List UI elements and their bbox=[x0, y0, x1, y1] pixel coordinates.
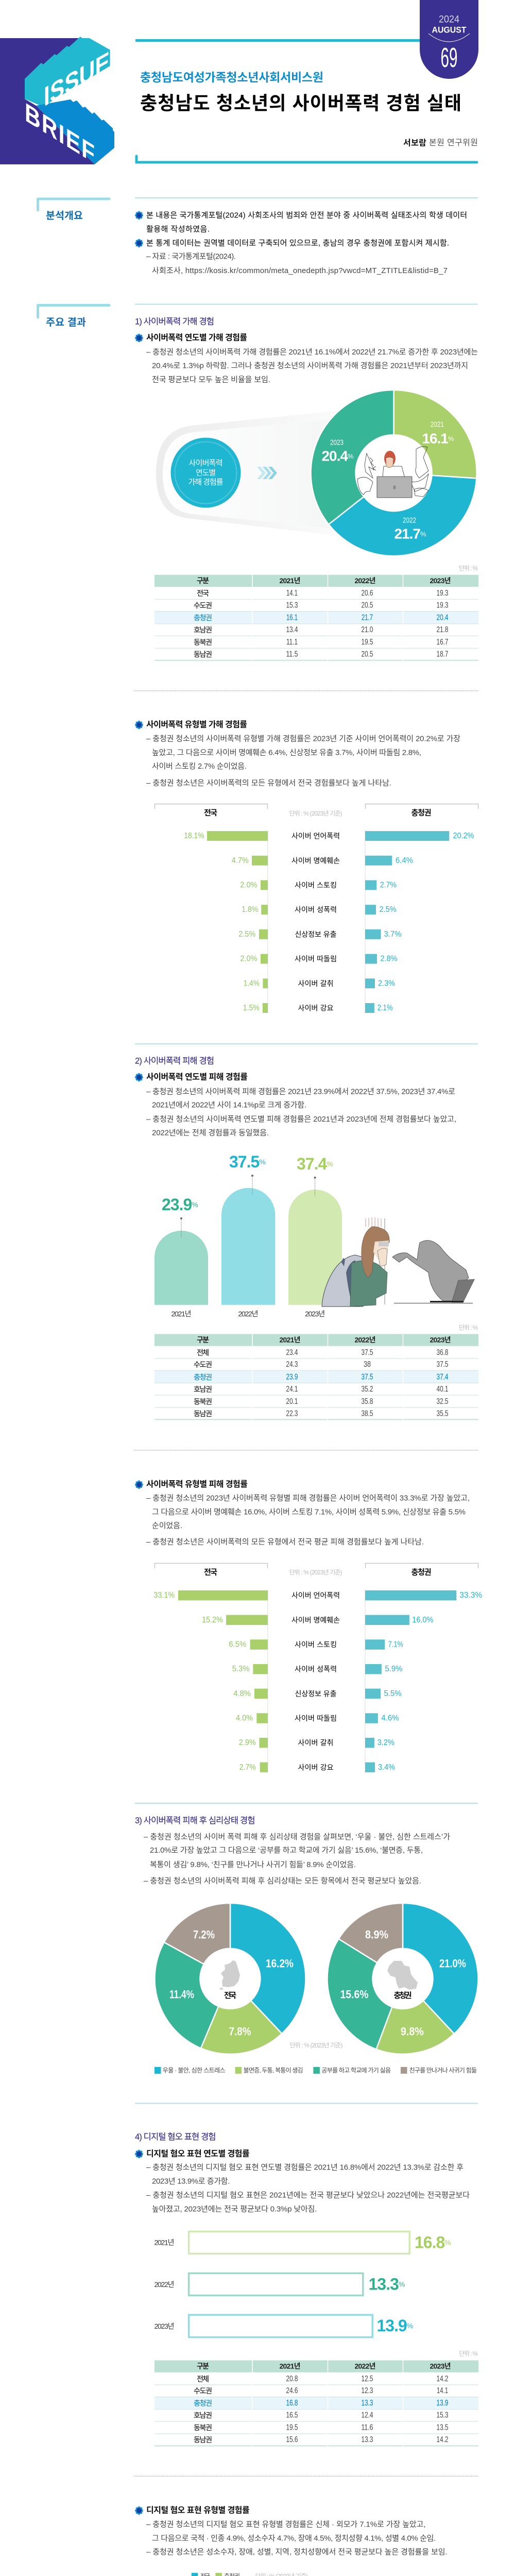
chungcheong bars bbox=[365, 831, 449, 1013]
table: victimisation by region: 37.5 bbox=[437, 1360, 448, 1369]
chart: victimisation by type, butterfly bars bbox=[153, 1563, 482, 1773]
icon: stressed student at laptop bbox=[357, 447, 428, 498]
national values: 1.5% bbox=[243, 1004, 260, 1012]
table: perpetration by region: 2023년 bbox=[430, 577, 451, 585]
type labels: 신상정보 유출 bbox=[295, 1689, 337, 1698]
table: victimisation by region: 38.5 bbox=[362, 1410, 373, 1418]
table: victimisation by region: 20.1 bbox=[286, 1397, 298, 1406]
text block: victimisation by type: – 충청권 청소년은 사이버폭력의 모든 유형에서 전국 평균 피해 경험률보다 높게 나타남. bbox=[146, 1537, 424, 1547]
table: victimisation by region: 35.8 bbox=[362, 1397, 373, 1406]
national values bbox=[153, 1591, 256, 1772]
table: victimisation by region: 35.5 bbox=[437, 1410, 448, 1418]
table: digital hate by region: 13.5 bbox=[437, 2424, 448, 2432]
table: perpetration by region: 20.5 bbox=[362, 650, 373, 658]
text block: victimisation by type: 순이었음. bbox=[152, 1521, 182, 1530]
chart: yearly victimisation arches bbox=[154, 1153, 342, 1318]
text block: yearly victimisation bbox=[135, 1073, 456, 1138]
table: digital hate by region: 동남권 bbox=[194, 2436, 212, 2444]
table: victimisation by region: 23.4 bbox=[286, 1348, 298, 1357]
national values: 4.7% bbox=[232, 856, 249, 865]
table: perpetration by region: 구분 bbox=[197, 577, 209, 585]
table: victimisation by region bbox=[154, 1324, 478, 1420]
leaders bbox=[180, 1175, 316, 1237]
organisation name: 충청남도여성가족청소년사회서비스원 bbox=[140, 71, 323, 84]
table: perpetration by region: 11.1 bbox=[286, 638, 298, 647]
table: victimisation by region: 24.1 bbox=[286, 1385, 298, 1394]
chart: national donut: 16.2% bbox=[266, 1957, 294, 1970]
table: perpetration by region: 13.4 bbox=[286, 625, 298, 634]
table: victimisation by region: 구분 bbox=[197, 1336, 209, 1344]
table: digital hate by region: 13.3 bbox=[362, 2399, 373, 2408]
national values: 2.0% bbox=[240, 955, 257, 963]
table: victimisation by region: 수도권 bbox=[194, 1361, 212, 1369]
subheading 2: 2) 사이버폭력 피해 경험 bbox=[135, 1056, 214, 1066]
chungcheong values: 20.2% bbox=[453, 832, 474, 840]
table: digital hate by region: 15.3 bbox=[437, 2411, 448, 2419]
chart: chungcheong donut: 충청권 bbox=[393, 1991, 412, 2000]
table: digital hate by region: 14.2 bbox=[437, 2375, 448, 2383]
chungcheong values: 16.0% bbox=[412, 1616, 433, 1624]
table: digital hate by region: 14.1 bbox=[437, 2386, 448, 2395]
table: digital hate by region: 12.5 bbox=[362, 2375, 373, 2383]
chungcheong values: 5.5% bbox=[384, 1689, 402, 1698]
topic circle bbox=[171, 438, 241, 508]
table: digital hate by region: 2022년 bbox=[354, 2362, 376, 2370]
chungcheong values: 6.4% bbox=[396, 856, 413, 865]
table: perpetration by region: 2022년 bbox=[354, 577, 376, 585]
source note: 사회조사, https://kosis.kr/common/meta_onedepth.jsp?vwcd=MT_ZTITLE&listid=B_7 bbox=[152, 266, 448, 275]
table: digital hate by region: 16.8 bbox=[286, 2399, 298, 2408]
donut labels: 20.4% bbox=[321, 448, 354, 464]
chart: national donut: 7.2% bbox=[193, 1928, 215, 1941]
chart: perpetration by type, butterfly bars bbox=[154, 804, 478, 1013]
chart: perpetration by type, butterfly bars: 전국 bbox=[204, 809, 217, 817]
year labels bbox=[171, 1310, 325, 1318]
type labels: 사이버 따돌림 bbox=[295, 955, 337, 963]
chungcheong bars bbox=[365, 1590, 456, 1772]
text block: yearly digital hate: 디지털 혐오 표현 연도별 경험률 bbox=[146, 2149, 250, 2158]
type labels: 사이버 언어폭력 bbox=[291, 832, 340, 840]
text block: perpetration by type: – 충청권 청소년은 사이버폭력의 모든 유형에서 전국 경험률보다 높게 나타남. bbox=[146, 779, 391, 787]
table: victimisation by region: 동북권 bbox=[194, 1397, 212, 1405]
table: victimisation by region: 36.8 bbox=[437, 1348, 448, 1357]
chungcheong values: 2.1% bbox=[377, 1004, 393, 1012]
table: victimisation by region: 23.9 bbox=[286, 1372, 298, 1381]
source note: – 자료 : 국가통계포털(2024). bbox=[146, 252, 236, 261]
table: digital hate by region: 11.6 bbox=[362, 2424, 373, 2432]
table: perpetration by region: 동남권 bbox=[194, 650, 212, 658]
section: 분석개요: 분석개요 bbox=[46, 210, 83, 222]
issue number badge: AUGUST bbox=[432, 25, 467, 35]
header bottom rule bbox=[136, 156, 477, 162]
table: victimisation by region: 40.1 bbox=[437, 1385, 448, 1394]
national values: 2.5% bbox=[238, 930, 255, 939]
text block: digital hate by type: 그 다음으로 국적 · 인종 4.9%, 성소수자 4.7%, 장애 4.5%, 정치성향 4.1%, 성별 4.0% 순임. bbox=[152, 2534, 436, 2543]
table: digital hate by region: 수도권 bbox=[194, 2386, 212, 2395]
table: digital hate by region bbox=[154, 2350, 478, 2447]
logo: issue brief block: ISSUE bbox=[44, 46, 110, 113]
chart: national donut bbox=[154, 1903, 306, 2054]
table: digital hate by region: 2021년 bbox=[279, 2362, 301, 2370]
table: victimisation by region: 24.3 bbox=[286, 1360, 298, 1369]
chart: funnel and donut of yearly perpetration bbox=[156, 390, 477, 556]
logo: issue brief block: BRIEF bbox=[25, 97, 95, 170]
table: victimisation by region: 37.4 bbox=[437, 1372, 449, 1381]
issue number badge bbox=[420, 0, 478, 79]
analysis bullet 1 bbox=[135, 211, 467, 234]
text block: yearly perpetration: 전국 평균보다 모두 높은 비율을 보임. bbox=[152, 375, 270, 384]
donut labels: 2022 bbox=[403, 516, 416, 524]
text block: yearly victimisation: – 충청권 청소년의 사이버폭력 피해 경험률은 2021년 23.9%에서 2022년 37.5%, 2023년 37.4%로 bbox=[146, 1087, 455, 1096]
national values: 6.5% bbox=[229, 1640, 246, 1649]
donut labels: 21.7% bbox=[394, 526, 426, 542]
unit note: 단위 : % (2023년 기준) bbox=[289, 2042, 343, 2049]
table: digital hate by region: 13.9 bbox=[437, 2399, 448, 2408]
national values: 33.1% bbox=[153, 1591, 175, 1600]
table: victimisation by region: 38 bbox=[364, 1360, 371, 1369]
table: victimisation by region: 37.5 bbox=[362, 1372, 373, 1381]
section: 주요 결과 heading: 주요 결과 bbox=[46, 317, 86, 328]
table: digital hate by region: 전체 bbox=[197, 2375, 209, 2383]
chungcheong values: 2.7% bbox=[380, 881, 397, 889]
table: perpetration by region: 충청권 bbox=[194, 614, 212, 622]
chart: chungcheong donut: 9.8% bbox=[401, 2025, 424, 2038]
text block: psychological state: 21.0%로 가장 높았고 그 다음으로 ‘공부를 하고 학교에 가기 싫음’ 15.6%, ‘불면증, 두통, bbox=[150, 1846, 423, 1855]
table: perpetration by region bbox=[154, 565, 478, 661]
chart: national donut: 전국 bbox=[224, 1991, 236, 2000]
text block: yearly digital hate: 높아졌고, 2023년에는 전국 평균보다 0.3%p 낮아짐. bbox=[152, 2205, 317, 2213]
table: victimisation by region: 충청권 bbox=[194, 1373, 212, 1381]
text block: digital hate by type: 디지털 혐오 표현 유형별 경험률 bbox=[146, 2506, 250, 2515]
text block: yearly victimisation: – 충청권 청소년의 사이버폭력 연도별 피해 경험률은 2021년과 2023년에 전체 경험률보다 높았고, bbox=[146, 1115, 456, 1124]
logo: issue brief block bbox=[0, 37, 114, 170]
table: perpetration by region: 호남권 bbox=[194, 626, 212, 634]
legend: psychological state: 우울 · 불안, 심한 스트레스 bbox=[163, 2066, 226, 2074]
illustration: girl frightened by online monster bbox=[322, 1217, 475, 1307]
section: 주요 결과 heading bbox=[38, 304, 478, 328]
table: perpetration by region: 20.5 bbox=[362, 601, 373, 610]
chart: perpetration by type, butterfly bars: 충청권 bbox=[411, 809, 432, 817]
table: perpetration by region: 16.7 bbox=[437, 638, 448, 647]
table: victimisation by region: 22.3 bbox=[286, 1410, 298, 1418]
issue number badge: 69 bbox=[441, 42, 457, 73]
text block: victimisation by type bbox=[135, 1480, 470, 1547]
chart: chungcheong donut: 21.0% bbox=[439, 1957, 466, 1970]
national values: 1.8% bbox=[242, 905, 258, 914]
chart: national donut: 11.4% bbox=[169, 1988, 194, 2001]
text block: perpetration by type: – 충청권 청소년의 사이버폭력 유형별 가해 경험률은 2023년 기준 사이버 언어폭력이 20.2%로 가장 bbox=[146, 735, 460, 743]
chungcheong values bbox=[377, 1591, 482, 1772]
national values: 2.0% bbox=[240, 881, 257, 889]
table: perpetration by region: 21.0 bbox=[362, 625, 373, 634]
legend: psychological state: 친구를 만나거나 사귀기 힘듦 bbox=[409, 2066, 477, 2074]
text block: yearly perpetration: 20.4%로 1.3%p 하락함. 그러나 충청권 청소년의 사이버폭력 가해 경험률은 2021년부터 2023년까지 bbox=[152, 362, 468, 370]
chart: digital hate outline bars: 2021년 bbox=[154, 2239, 174, 2247]
analysis bullet 2: 본 통계 데이터는 권역별 데이터로 구축되어 있으므로, 충남의 경우 충청권에 포함시켜 제시함. bbox=[146, 239, 449, 247]
text block: yearly victimisation: 사이버폭력 연도별 피해 경험률 bbox=[146, 1073, 248, 1082]
chart: chungcheong donut bbox=[328, 1903, 478, 2054]
type labels: 사이버 스토킹 bbox=[295, 1640, 337, 1649]
table: digital hate by region: 동북권 bbox=[194, 2424, 212, 2432]
type labels: 사이버 갈취 bbox=[298, 1739, 334, 1747]
legend: national vs chungcheong bbox=[192, 2573, 308, 2576]
national values: 4.8% bbox=[233, 1689, 251, 1698]
type labels: 신상정보 유출 bbox=[295, 930, 337, 938]
source note bbox=[146, 252, 448, 275]
subheading 3: 3) 사이버폭력 피해 후 심리상태 경험 bbox=[135, 1816, 255, 1825]
table: perpetration by region: 20.6 bbox=[362, 589, 373, 598]
chungcheong values: 3.2% bbox=[377, 1738, 394, 1747]
legend: psychological state bbox=[154, 2066, 477, 2074]
chungcheong values: 3.7% bbox=[384, 930, 402, 939]
text block: yearly victimisation: 2021년에서 2022년 사이 14.1%p로 크게 증가함. bbox=[152, 1100, 306, 1110]
national values: 2.9% bbox=[239, 1738, 256, 1747]
chart: digital hate outline bars: 2023년 bbox=[154, 2322, 174, 2330]
type labels bbox=[291, 1591, 340, 1771]
type labels: 사이버 갈취 bbox=[298, 979, 334, 988]
table: digital hate by region: 충청권 bbox=[194, 2399, 212, 2408]
text block: digital hate by type: – 충청권 청소년의 디지털 혐오 표현 유형별 경험률은 신체 · 외모가 7.1%로 가장 높았고, bbox=[146, 2520, 425, 2529]
table: victimisation by region: 2021년 bbox=[279, 1336, 301, 1344]
chart: chungcheong donut: 8.9% bbox=[365, 1928, 388, 1941]
value labels: 37.4% bbox=[297, 1155, 333, 1173]
chungcheong values: 5.9% bbox=[385, 1665, 402, 1673]
table: digital hate by region: 19.5 bbox=[286, 2424, 298, 2432]
arrow: chevrons bbox=[257, 467, 277, 479]
table: digital hate by region: 20.8 bbox=[286, 2375, 298, 2383]
table: perpetration by region: 19.3 bbox=[437, 589, 448, 598]
national values: 18.1% bbox=[184, 832, 204, 840]
donut labels: 16.1% bbox=[422, 431, 454, 446]
chungcheong values: 7.1% bbox=[388, 1640, 403, 1649]
chart: victimisation by type, butterfly bars: 단위 : % (2023년 기준) bbox=[289, 1569, 342, 1576]
type labels: 사이버 강요 bbox=[298, 1763, 334, 1771]
table: digital hate by region: 호남권 bbox=[194, 2411, 212, 2419]
type labels bbox=[291, 832, 340, 1012]
chart: national donut: 7.8% bbox=[229, 2025, 251, 2038]
table: perpetration by region: 16.1 bbox=[286, 613, 298, 622]
text block: yearly victimisation: 2022년에는 전체 경험률과 동일했음. bbox=[152, 1128, 269, 1138]
text block: psychological state bbox=[144, 1833, 450, 1886]
table: perpetration by region: 2021년 bbox=[279, 577, 301, 585]
text block: perpetration by type: 사이버 스토킹 2.7% 순이었음. bbox=[152, 762, 247, 771]
year labels: 2021년 bbox=[171, 1310, 192, 1318]
title: 충청남도 청소년의 사이버폭력 경험 실태 bbox=[140, 93, 461, 113]
text block: yearly digital hate: 2023년 13.9%로 증가함. bbox=[152, 2177, 230, 2185]
type labels: 사이버 성폭력 bbox=[295, 1665, 337, 1673]
donut labels bbox=[321, 420, 454, 542]
national bars bbox=[178, 1590, 268, 1772]
text block: psychological state: 복통이 생김’ 9.8%, ‘친구를 만나거나 사귀기 힘듦’ 8.9% 순이었음. bbox=[150, 1860, 356, 1869]
table: victimisation by region: 전체 bbox=[197, 1349, 209, 1357]
chart: digital hate outline bars bbox=[154, 2231, 451, 2337]
table: perpetration by region: 19.5 bbox=[362, 638, 373, 647]
donut segments bbox=[311, 390, 477, 556]
donut labels: 2023 bbox=[330, 438, 344, 447]
year labels: 2023년 bbox=[305, 1310, 325, 1318]
chart: victimisation by type, butterfly bars: 충청권 bbox=[411, 1568, 432, 1577]
text block: digital hate by type bbox=[135, 2506, 448, 2556]
table: perpetration by region: 15.3 bbox=[286, 601, 298, 610]
type labels: 사이버 따돌림 bbox=[295, 1714, 337, 1722]
national values: 4.0% bbox=[236, 1714, 253, 1723]
analysis bullet 1: 본 내용은 국가통계포털(2024) 사회조사의 범죄와 안전 분야 중 사이버폭력 실태조사의 학생 데이터 bbox=[146, 211, 467, 219]
table: digital hate by region: 14.2 bbox=[437, 2435, 448, 2444]
text block: yearly perpetration: – 충청권 청소년의 사이버폭력 가해 경험률은 2021년 16.1%에서 2022년 21.7%로 증가한 후 2023년에는 bbox=[146, 348, 478, 357]
table: digital hate by region: 단위 : % bbox=[459, 2350, 478, 2358]
year labels: 2022년 bbox=[238, 1310, 259, 1318]
icon: map of Chungcheong bbox=[387, 1961, 418, 1990]
table: victimisation by region: 2022년 bbox=[354, 1336, 376, 1344]
text block: perpetration by type bbox=[135, 720, 460, 787]
table: perpetration by region: 단위 : % bbox=[459, 565, 478, 572]
text block: victimisation by type: 그 다음으로 사이버 명예훼손 16.0%, 사이버 스토킹 7.1%, 사이버 성폭력 5.9%, 신상정보 유출 5.5% bbox=[152, 1507, 466, 1517]
type labels: 사이버 명예훼손 bbox=[291, 856, 340, 865]
table: victimisation by region: 동남권 bbox=[194, 1410, 212, 1418]
national values: 1.4% bbox=[244, 979, 260, 988]
section: 분석개요 bbox=[38, 198, 478, 275]
table: victimisation by region: 호남권 bbox=[194, 1385, 212, 1393]
table: perpetration by region: 21.7 bbox=[362, 613, 373, 622]
chart: digital hate outline bars: 13.3% bbox=[369, 2275, 405, 2293]
analysis bullet 1: 활용해 작성하였음. bbox=[146, 225, 210, 234]
national values: 15.2% bbox=[202, 1616, 223, 1624]
table: perpetration by region: 동북권 bbox=[194, 638, 212, 647]
chungcheong values: 4.6% bbox=[381, 1714, 399, 1723]
chart: victimisation by type, butterfly bars: 전국 bbox=[204, 1568, 217, 1577]
table: digital hate by region: 13.3 bbox=[362, 2435, 373, 2444]
text block: psychological state: – 충청권 청소년의 사이버 폭력 피해 후 심리상태 경험을 살펴보면, ‘우울 · 불안, 심한 스트레스’가 bbox=[144, 1833, 450, 1841]
topic circle: 가해 경험률 bbox=[188, 478, 224, 486]
chungcheong values bbox=[377, 832, 474, 1012]
table: digital hate by region: 2023년 bbox=[430, 2362, 451, 2370]
table: perpetration by region: 수도권 bbox=[194, 601, 212, 609]
chungcheong values: 33.3% bbox=[459, 1591, 482, 1600]
table: digital hate by region: 구분 bbox=[197, 2362, 209, 2370]
text block: psychological state: – 충청권 청소년의 사이버폭력 피해 후 심리상태는 모든 항목에서 전국 평균보다 높았음. bbox=[144, 1876, 421, 1886]
chungcheong values: 2.3% bbox=[378, 979, 395, 988]
text block: perpetration by type: 높았고, 그 다음으로 사이버 명예훼손 6.4%, 신상정보 유출 3.7%, 사이버 따돌림 2.8%, bbox=[152, 748, 421, 757]
topic circle: 연도별 bbox=[196, 469, 216, 477]
chart: digital hate outline bars: 16.8% bbox=[415, 2233, 451, 2252]
header top rule bbox=[135, 39, 420, 42]
type labels: 사이버 강요 bbox=[298, 1004, 334, 1012]
table: perpetration by region: 11.5 bbox=[286, 650, 298, 658]
table: perpetration by region: 전국 bbox=[197, 589, 209, 598]
table: digital hate by region: 16.5 bbox=[286, 2411, 298, 2419]
icon: map of Korea bbox=[219, 1960, 240, 1990]
text block: yearly digital hate: – 충청권 청소년의 디지털 혐오 표현은 2021년에는 전국 평균보다 낮았으나 2022년에는 전국평균보다 bbox=[146, 2191, 470, 2199]
table: victimisation by region: 32.5 bbox=[437, 1397, 448, 1406]
table: perpetration by region: 20.4 bbox=[437, 613, 449, 622]
table: perpetration by region: 18.7 bbox=[437, 650, 448, 658]
table: perpetration by region: 19.3 bbox=[437, 601, 448, 610]
text block: perpetration by type: 사이버폭력 유형별 가해 경험률 bbox=[146, 720, 247, 730]
text block: victimisation by type: 사이버폭력 유형별 피해 경험률 bbox=[146, 1480, 248, 1489]
topic circle: 사이버폭력 bbox=[188, 459, 222, 468]
text block: yearly perpetration: 사이버폭력 연도별 가해 경험률 bbox=[146, 333, 247, 342]
type labels: 사이버 명예훼손 bbox=[291, 1616, 340, 1624]
national bars bbox=[207, 831, 268, 1013]
donut labels: 2021 bbox=[431, 420, 444, 429]
chart: perpetration by type, butterfly bars: 단위 : % (2023년 기준) bbox=[289, 810, 342, 817]
chart: digital hate outline bars: 2022년 bbox=[154, 2280, 174, 2289]
legend: psychological state: 불면증, 두통, 복통이 생김 bbox=[244, 2066, 303, 2074]
table: victimisation by region: 단위 : % bbox=[459, 1324, 478, 1331]
text block: victimisation by type: – 충청권 청소년의 2023년 사이버폭력 유형별 피해 경험률은 사이버 언어폭력이 33.3%로 가장 높았고, bbox=[146, 1494, 470, 1502]
value labels bbox=[162, 1153, 333, 1214]
text block: yearly digital hate bbox=[135, 2149, 470, 2213]
issue number badge: 2024 bbox=[439, 14, 459, 25]
chart: chungcheong donut: 15.6% bbox=[340, 1988, 369, 2001]
subheading 1: 1) 사이버폭력 가해 경험 bbox=[135, 316, 214, 327]
type labels: 사이버 언어폭력 bbox=[291, 1591, 340, 1600]
author: 서보람 본원 연구위원 bbox=[403, 138, 478, 147]
type labels: 사이버 성폭력 bbox=[295, 906, 337, 914]
table: digital hate by region: 12.4 bbox=[362, 2411, 373, 2419]
text block: digital hate by type: – 충청권 청소년은 성소수자, 장애, 성별, 지역, 정치성향에서 전국 평균보다 높은 경험률을 보임. bbox=[146, 2548, 448, 2556]
national values: 5.3% bbox=[232, 1665, 250, 1673]
subheading 4: 4) 디지털 혐오 표현 경험 bbox=[135, 2132, 216, 2142]
chungcheong values: 3.4% bbox=[378, 1763, 395, 1772]
table: digital hate by region: 15.6 bbox=[286, 2435, 298, 2444]
table: perpetration by region: 21.8 bbox=[437, 625, 448, 634]
text block: yearly digital hate: – 충청권 청소년의 디지털 혐오 표현 연도별 경험률은 2021년 16.8%에서 2022년 13.3%로 감소한 후 bbox=[146, 2163, 464, 2172]
table: victimisation by region: 35.2 bbox=[362, 1385, 373, 1394]
value labels: 23.9% bbox=[162, 1195, 198, 1214]
chart: digital hate outline bars: 13.9% bbox=[377, 2316, 413, 2335]
table: victimisation by region: 2023년 bbox=[430, 1336, 451, 1344]
table: digital hate by region: 12.3 bbox=[362, 2386, 373, 2395]
national values: 2.7% bbox=[239, 1763, 256, 1772]
table: victimisation by region: 37.5 bbox=[362, 1348, 373, 1357]
type labels: 사이버 스토킹 bbox=[295, 881, 337, 889]
chungcheong values: 2.5% bbox=[380, 905, 397, 914]
value labels: 37.5% bbox=[229, 1153, 266, 1171]
table: perpetration by region: 14.1 bbox=[286, 589, 298, 598]
table: digital hate by region: 24.6 bbox=[286, 2386, 298, 2395]
chungcheong values: 2.8% bbox=[380, 955, 398, 963]
text block: yearly perpetration bbox=[135, 333, 478, 384]
legend: psychological state: 공부를 하고 학교에 가기 싫음 bbox=[321, 2066, 391, 2074]
national values bbox=[184, 832, 260, 1012]
